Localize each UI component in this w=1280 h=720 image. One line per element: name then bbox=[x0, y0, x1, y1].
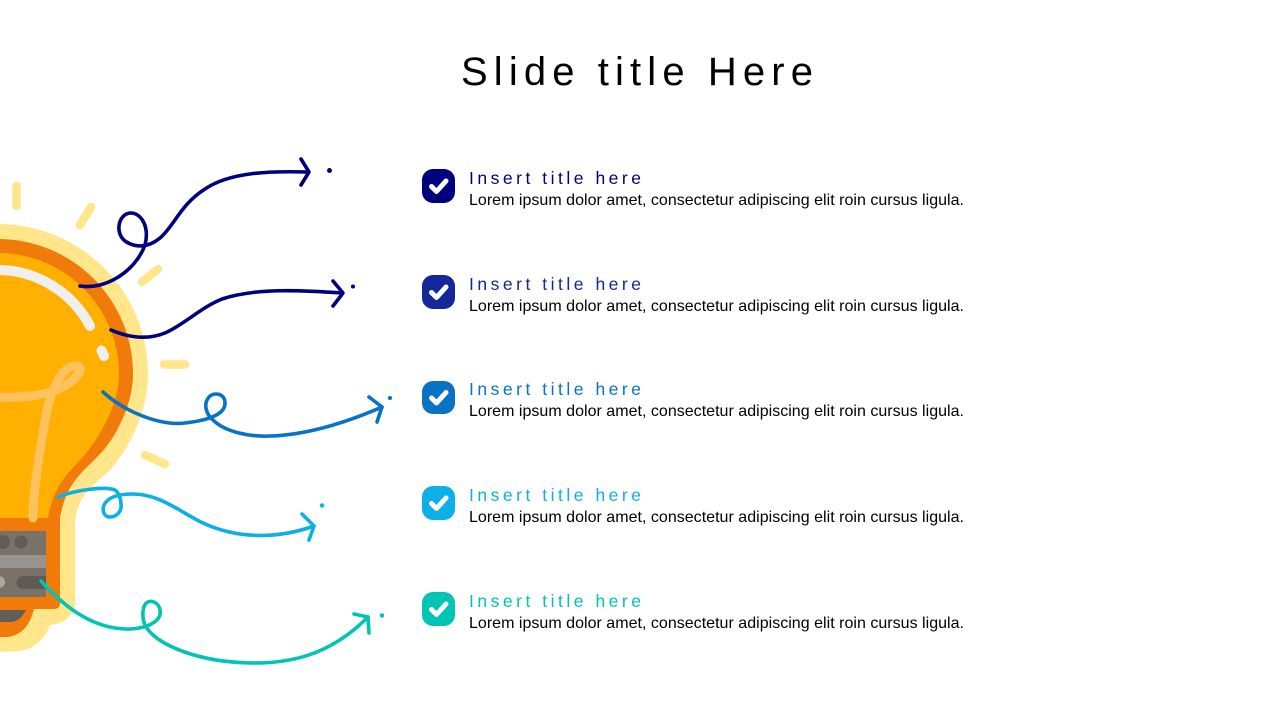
base dark dot left bbox=[0, 535, 10, 549]
arrow 1 bbox=[80, 159, 331, 287]
base light stripe bbox=[0, 555, 46, 568]
bulb tip bbox=[0, 610, 26, 622]
icon: check badge bbox=[422, 486, 455, 520]
item text: Lorem ipsum dolor amet, consectetur adipiscing elit roin cursus ligula. bbox=[469, 403, 964, 420]
glass highlight bbox=[0, 270, 90, 326]
list item 3 bbox=[422, 379, 964, 420]
item text: Lorem ipsum dolor amet, consectetur adipiscing elit roin cursus ligula. bbox=[469, 298, 964, 315]
list item 2 bbox=[422, 274, 964, 315]
item title: Insert title here bbox=[469, 379, 641, 399]
arrow 2 bbox=[111, 281, 354, 337]
list item 4 bbox=[422, 485, 964, 526]
item text: Lorem ipsum dolor amet, consectetur adipiscing elit roin cursus ligula. bbox=[469, 615, 964, 632]
light rays bbox=[16, 186, 185, 464]
bulb outer glow bbox=[0, 224, 148, 652]
icon: check badge bbox=[422, 169, 455, 203]
list item 5 bbox=[422, 591, 964, 632]
item text: Lorem ipsum dolor amet, consectetur adipiscing elit roin cursus ligula. bbox=[469, 192, 964, 209]
filament bbox=[0, 366, 80, 518]
item title: Insert title here bbox=[469, 168, 641, 188]
icon: check badge bbox=[422, 275, 455, 309]
item title: Insert title here bbox=[469, 591, 641, 611]
item text: Lorem ipsum dolor amet, consectetur adipiscing elit roin cursus ligula. bbox=[469, 509, 964, 526]
list item 1 bbox=[422, 168, 964, 209]
icon: light bulb bbox=[0, 224, 148, 652]
screw base bbox=[0, 531, 46, 597]
icon: check badge bbox=[422, 592, 455, 626]
item title: Insert title here bbox=[469, 485, 641, 505]
arrow 4 bbox=[58, 488, 324, 540]
item title: Insert title here bbox=[469, 274, 641, 294]
bulb orange outline bbox=[0, 239, 133, 637]
arrow 3 bbox=[103, 392, 391, 436]
glass highlight dot bbox=[102, 350, 104, 356]
bulb amber glass bbox=[0, 253, 119, 518]
base dark pill bbox=[16, 576, 46, 589]
title: Slide title Here bbox=[461, 50, 813, 94]
base light dot bbox=[0, 576, 5, 588]
base dark dot right bbox=[14, 536, 28, 548]
arrow 5 bbox=[41, 581, 384, 663]
icon: check badge bbox=[422, 381, 455, 414]
